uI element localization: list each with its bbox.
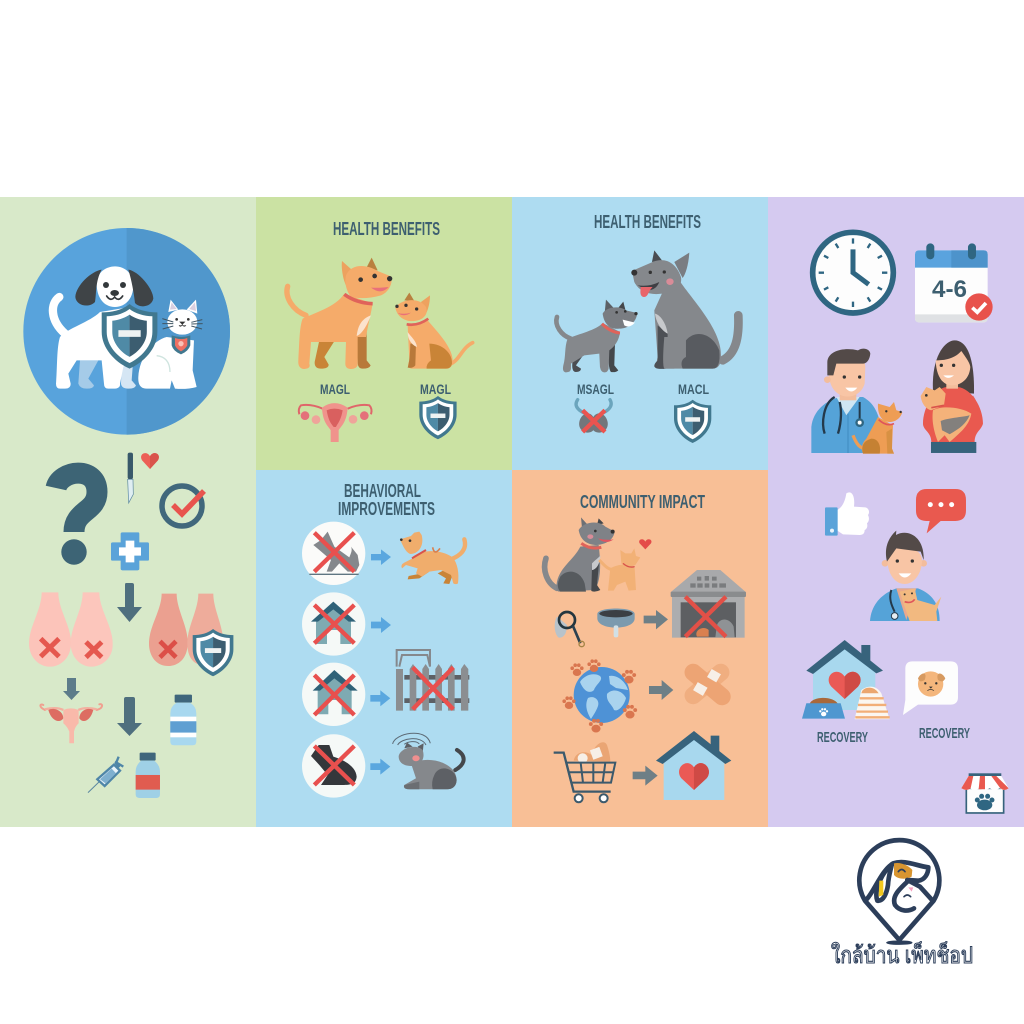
row 2: house crossed out xyxy=(302,592,391,656)
heading: HEALTH BENEFITS xyxy=(594,212,701,232)
icon: blue medicine bottle xyxy=(170,695,196,745)
icon: location pin with dog and cat line art xyxy=(859,840,939,944)
icon: speech bubble with puppy face xyxy=(903,661,958,715)
label: MSAGL: MSAGL xyxy=(577,382,614,397)
icon: orange adult dog xyxy=(287,258,392,369)
icon: clock xyxy=(813,232,893,313)
arrow xyxy=(649,680,673,700)
icon: home with heart, food bowl and treats xyxy=(802,640,890,719)
icon: scalpel and heart xyxy=(128,453,159,503)
label: recovery right: RECOVERY xyxy=(919,725,970,742)
icon: shopping cart with bandages xyxy=(554,742,615,802)
heading: HEALTH BENEFITS xyxy=(333,219,440,239)
icon: medical cross xyxy=(111,532,149,570)
arrow: small down xyxy=(63,678,80,700)
icon: thumbs up xyxy=(825,492,869,536)
icon: grey dog and orange cat with heart xyxy=(545,517,651,592)
icon: question mark xyxy=(56,473,97,565)
panel: health benefits female xyxy=(256,197,512,470)
icon: grey small dog xyxy=(556,300,638,372)
heading xyxy=(338,481,435,519)
panel: recovery and care xyxy=(768,197,1024,827)
icon: second testes pair with a shield xyxy=(149,594,233,676)
arrow: down to vaccines xyxy=(117,697,142,736)
icon: orange puppy xyxy=(395,293,473,369)
icon: shield xyxy=(419,396,457,439)
icon: crossed bandages xyxy=(681,660,734,709)
icon: shield xyxy=(674,400,711,443)
arrow xyxy=(633,766,658,786)
icon: vet holding a small dog xyxy=(870,531,941,621)
arrow xyxy=(644,610,668,629)
icon: vet with dog xyxy=(811,349,885,453)
panel: behavioral improvements xyxy=(256,470,512,827)
icon: owner holding pet xyxy=(921,340,983,453)
icon: grey large dog xyxy=(631,250,738,369)
label: MAGL left: MAGL xyxy=(320,382,350,397)
heading: IMPROVEMENTS xyxy=(338,499,435,519)
label: recovery left: RECOVERY xyxy=(817,729,868,746)
icon: globe with paw prints xyxy=(562,659,637,732)
text: shop name in Thai: ใกล้บ้าน เพ็ทช็อป xyxy=(831,940,973,968)
panel: community impact xyxy=(512,470,768,827)
icon: crossed-out testes pair xyxy=(29,592,113,667)
icon: uterus xyxy=(40,704,102,743)
icon: pet shop xyxy=(961,773,1009,813)
icon: red label vial xyxy=(136,753,160,798)
icon: leash xyxy=(555,612,584,647)
panel: spay and neuter overview xyxy=(0,197,256,827)
icon: speech bubble xyxy=(916,489,966,533)
icon: calendar 4-6: 4-6 xyxy=(932,276,967,303)
icon: shelter crossed out xyxy=(671,570,746,638)
row 4: cat crossed out, calm cat xyxy=(302,733,464,798)
icon: dog and cat with shield in a blue circle xyxy=(23,228,230,435)
logo: pet shop location pin xyxy=(831,840,973,968)
heading: COMMUNITY IMPACT xyxy=(580,492,705,512)
row 3: house crossed out with fence xyxy=(302,650,469,726)
icon: house with heart xyxy=(656,731,731,800)
icon: check mark in a ring xyxy=(162,486,204,526)
row 1: aggressive dog crossed out xyxy=(302,522,465,585)
arrow: down to testes xyxy=(117,583,142,622)
icon: calendar 4-6 xyxy=(915,243,993,322)
label: MACL: MACL xyxy=(678,382,709,397)
icon: uterus outline xyxy=(299,403,372,442)
icon: orange dog beside vet xyxy=(853,402,902,454)
panel: health benefits male xyxy=(512,197,768,470)
heading: BEHAVIORAL xyxy=(344,481,421,501)
icon: syringe xyxy=(88,757,123,793)
icon: collar xyxy=(597,608,635,637)
label: MAGL right: MAGL xyxy=(420,382,451,397)
icon: crossed-out testes xyxy=(576,400,611,433)
